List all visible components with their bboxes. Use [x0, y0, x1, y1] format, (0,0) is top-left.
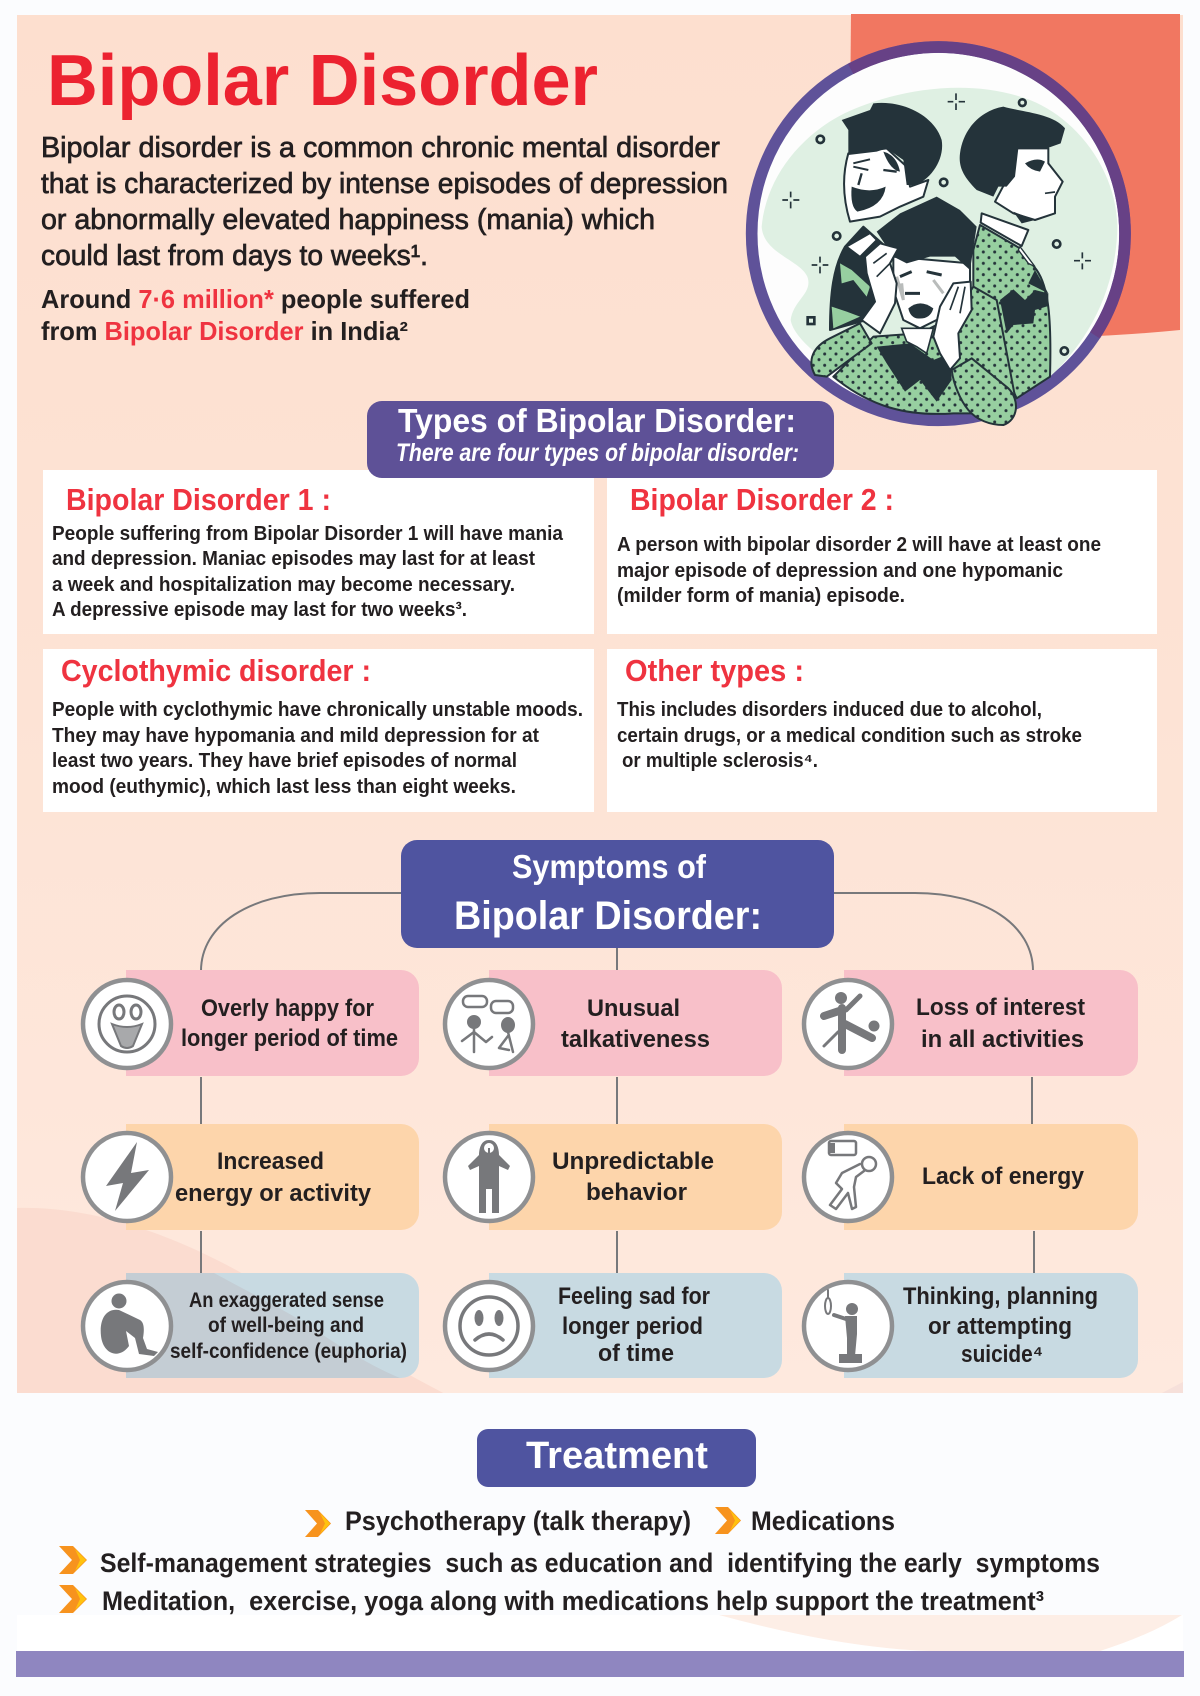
icon: chevron bullet — [305, 1510, 331, 1537]
icon: chevron bullet — [59, 1546, 87, 1574]
intro paragraph: could last from days to weeks¹. — [41, 240, 428, 272]
symptom: feeling sad: Feeling sad for — [558, 1283, 710, 1310]
symptom: increased energy — [83, 1124, 419, 1230]
symptom: thinking of suicide: suicide⁴ — [961, 1341, 1043, 1368]
panel: bipolar disorder 2: A person with bipolar disorder 2 will have at least one — [617, 534, 1101, 556]
symptom: unusual talkativeness: talkativeness — [561, 1026, 710, 1053]
symptom: feeling sad: longer period — [562, 1313, 703, 1340]
symptom: loss of interest: in all activities — [921, 1026, 1084, 1053]
heading: types of bipolar disorder — [367, 401, 834, 478]
symptom: increased energy: energy or activity — [175, 1180, 372, 1207]
panel: cyclothymic disorder: Cyclothymic disorder : — [61, 653, 371, 688]
icon: figure with noose — [804, 1282, 892, 1370]
symptom: unpredictable behavior — [445, 1124, 782, 1230]
intro paragraph: or abnormally elevated happiness (mania) which — [41, 204, 655, 236]
symptom: overly happy: longer period of time — [181, 1025, 398, 1052]
illustration: three moods portrait — [752, 47, 1125, 425]
treatment list: Self-management strategies such as education and identifying the early symptoms — [100, 1548, 1100, 1578]
panel: other types: This includes disorders induced due to alcohol, — [617, 699, 1042, 721]
intro paragraph: that is characterized by intense episodes of depression — [41, 168, 728, 200]
intro paragraph: Bipolar disorder is a common chronic mental disorder — [41, 132, 720, 164]
panel: bipolar disorder 1: Bipolar Disorder 1 : — [66, 482, 331, 517]
symptom: thinking of suicide: or attempting — [928, 1313, 1072, 1340]
panel: bipolar disorder 1: a week and hospitalization may become necessary. — [52, 574, 515, 596]
intro paragraph — [41, 132, 728, 272]
symptom: loss of interest — [804, 970, 1138, 1076]
heading: symptoms of bipolar disorder: Bipolar Disorder: — [454, 894, 762, 938]
panel: bipolar disorder 1: and depression. Maniac episodes may last for at least — [52, 548, 535, 570]
panel: cyclothymic disorder: mood (euthymic), which last less than eight weeks. — [52, 776, 516, 798]
symptom: unusual talkativeness: Unusual — [587, 995, 680, 1022]
symptom: exaggerated sense of well-being: An exaggerated sense — [189, 1289, 384, 1312]
panel: other types: certain drugs, or a medical condition such as stroke — [617, 725, 1082, 747]
prevalence statement — [41, 284, 470, 346]
symptom: lack of energy — [804, 1124, 1138, 1230]
icon: chevron bullet — [715, 1507, 741, 1534]
prevalence statement: Around 7·6 million* people suffered — [41, 284, 470, 314]
sparkles and dots — [782, 93, 1091, 273]
symptom: exaggerated sense of well-being: of well-being and — [208, 1314, 364, 1337]
heading: treatment — [477, 1429, 756, 1487]
symptom: increased energy: Increased — [217, 1148, 324, 1175]
panel: bipolar disorder 1: A depressive episode may last for two weeks³. — [52, 599, 467, 621]
panel: cyclothymic disorder — [43, 649, 594, 812]
prevalence statement: from Bipolar Disorder in India² — [41, 316, 408, 346]
panel: bipolar disorder 2: Bipolar Disorder 2 : — [630, 482, 894, 517]
icon: sad face — [445, 1282, 533, 1370]
right man — [960, 107, 1065, 398]
treatment list: Meditation, exercise, yoga along with medications help support the treatment³ — [102, 1586, 1044, 1616]
symptom: thinking of suicide — [804, 1273, 1138, 1378]
icon: lightning bolt — [83, 1133, 171, 1221]
left man — [830, 103, 942, 330]
panel: bipolar disorder 1: People suffering from Bipolar Disorder 1 will have mania — [52, 523, 564, 545]
green backdrop — [762, 88, 1117, 377]
icon: chevron bullet — [59, 1585, 87, 1613]
panel: bipolar disorder 2: (milder form of mania) episode. — [617, 585, 905, 607]
heading: symptoms of bipolar disorder — [401, 840, 834, 948]
panel: cyclothymic disorder: People with cyclothymic have chronically unstable moods. — [52, 699, 583, 721]
symptom: thinking of suicide: Thinking, planning — [903, 1283, 1098, 1310]
middle man — [811, 197, 1016, 425]
heading: types of bipolar disorder: There are four types of bipolar disorder: — [396, 439, 799, 467]
symptom: overly happy — [83, 970, 419, 1076]
symptom connector lines — [201, 893, 1034, 1273]
icon: two people talking — [445, 980, 533, 1068]
symptom: lack of energy: Lack of energy — [922, 1163, 1085, 1190]
icon: kicking figure — [804, 980, 892, 1068]
symptom: unpredictable behavior: Unpredictable — [552, 1148, 714, 1175]
symptom: loss of interest: Loss of interest — [916, 994, 1085, 1021]
heading: treatment: Treatment — [526, 1435, 708, 1477]
icon: person holding head — [445, 1133, 533, 1221]
symptom: feeling sad — [445, 1273, 782, 1378]
treatment list: Psychotherapy (talk therapy) — [345, 1506, 691, 1536]
heading: symptoms of bipolar disorder: Symptoms of — [512, 848, 707, 885]
symptom: unpredictable behavior: behavior — [586, 1179, 687, 1206]
panel: other types — [607, 649, 1157, 812]
symptom: feeling sad: of time — [598, 1340, 674, 1367]
icon: sitting person — [83, 1282, 171, 1370]
panel: cyclothymic disorder: least two years. They have brief episodes of normal — [52, 750, 517, 772]
treatment list — [59, 1506, 1100, 1616]
footer bar — [16, 1651, 1184, 1677]
symptom: exaggerated sense of well-being: self-confidence (euphoria) — [170, 1340, 407, 1363]
heading: types of bipolar disorder: Types of Bipolar Disorder: — [398, 402, 796, 439]
title: Bipolar Disorder — [47, 41, 598, 121]
treatment list: Medications — [751, 1506, 895, 1536]
panel: bipolar disorder 1 — [43, 470, 594, 634]
panel: other types: Other types : — [625, 653, 804, 688]
panel: bipolar disorder 2 — [607, 470, 1157, 634]
panel: bipolar disorder 2: major episode of depression and one hypomanic — [617, 560, 1063, 582]
icon: tired person with battery — [804, 1133, 892, 1221]
symptom: unusual talkativeness — [445, 970, 782, 1076]
symptom: overly happy: Overly happy for — [201, 995, 374, 1022]
red corner shape — [848, 14, 1180, 339]
icon: laughing face — [83, 980, 171, 1068]
panel: other types: or multiple sclerosis⁴. — [622, 750, 818, 772]
symptom: exaggerated sense of well-being — [83, 1273, 419, 1378]
panel: cyclothymic disorder: They may have hypomania and mild depression for at — [52, 725, 539, 747]
treatment section background — [17, 1393, 1183, 1651]
